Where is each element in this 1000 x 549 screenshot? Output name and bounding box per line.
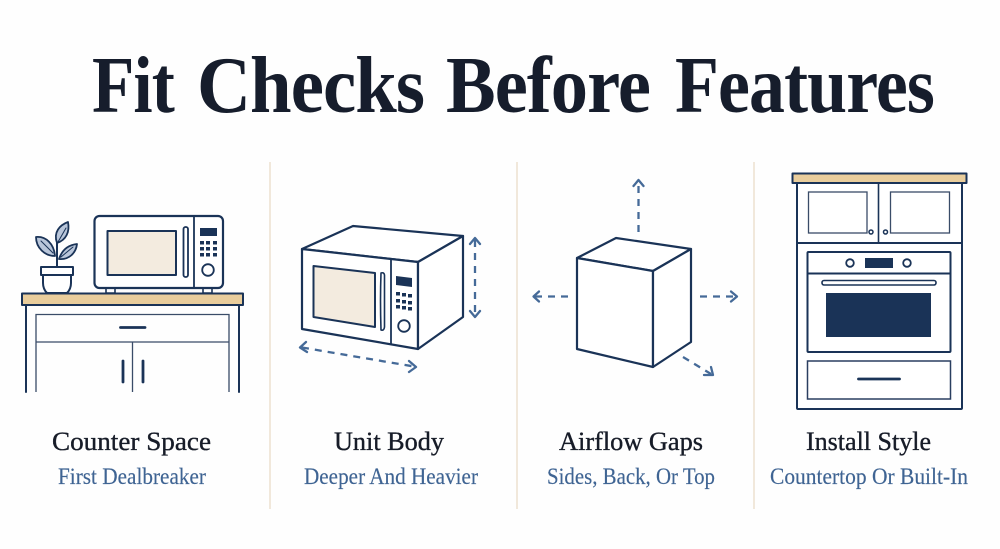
icon: box — [577, 238, 691, 367]
title: Features — [675, 42, 934, 130]
icon: upper cabinet with countertop — [792, 174, 966, 243]
title — [92, 42, 934, 130]
panel: counter space — [22, 216, 243, 489]
icon: countertop microwave — [94, 216, 223, 293]
arrow: back clearance — [683, 357, 713, 375]
heading: airflow gaps: Airflow Gaps — [559, 427, 703, 456]
icon: potted plant — [36, 222, 77, 293]
heading: counter space: Counter Space — [52, 427, 211, 456]
heading: install style: Install Style — [806, 427, 931, 456]
icon: microwave in perspective — [302, 226, 463, 349]
icon: built-in oven — [797, 243, 962, 409]
panel: unit body — [300, 226, 480, 489]
subheading: first dealbreaker: First Dealbreaker — [58, 464, 206, 489]
title: Checks — [197, 42, 424, 130]
title: Fit — [92, 42, 175, 130]
arrow: right clearance — [700, 292, 737, 302]
subheading: deeper and heavier: Deeper And Heavier — [304, 464, 478, 489]
heading: unit body: Unit Body — [334, 427, 444, 456]
arrow: width dimension — [300, 342, 416, 372]
arrow: height dimension — [470, 238, 480, 317]
subheading: sides, back, or top: Sides, Back, Or Top — [547, 464, 715, 489]
subheading: countertop or built-in: Countertop Or Built-In — [770, 464, 968, 489]
arrow: left clearance — [534, 292, 568, 302]
panel: airflow gaps — [534, 180, 737, 489]
panel: install style — [770, 174, 968, 489]
title: Before — [446, 42, 650, 130]
icon: counter and cabinet — [22, 294, 243, 392]
arrow: top clearance — [634, 180, 644, 232]
